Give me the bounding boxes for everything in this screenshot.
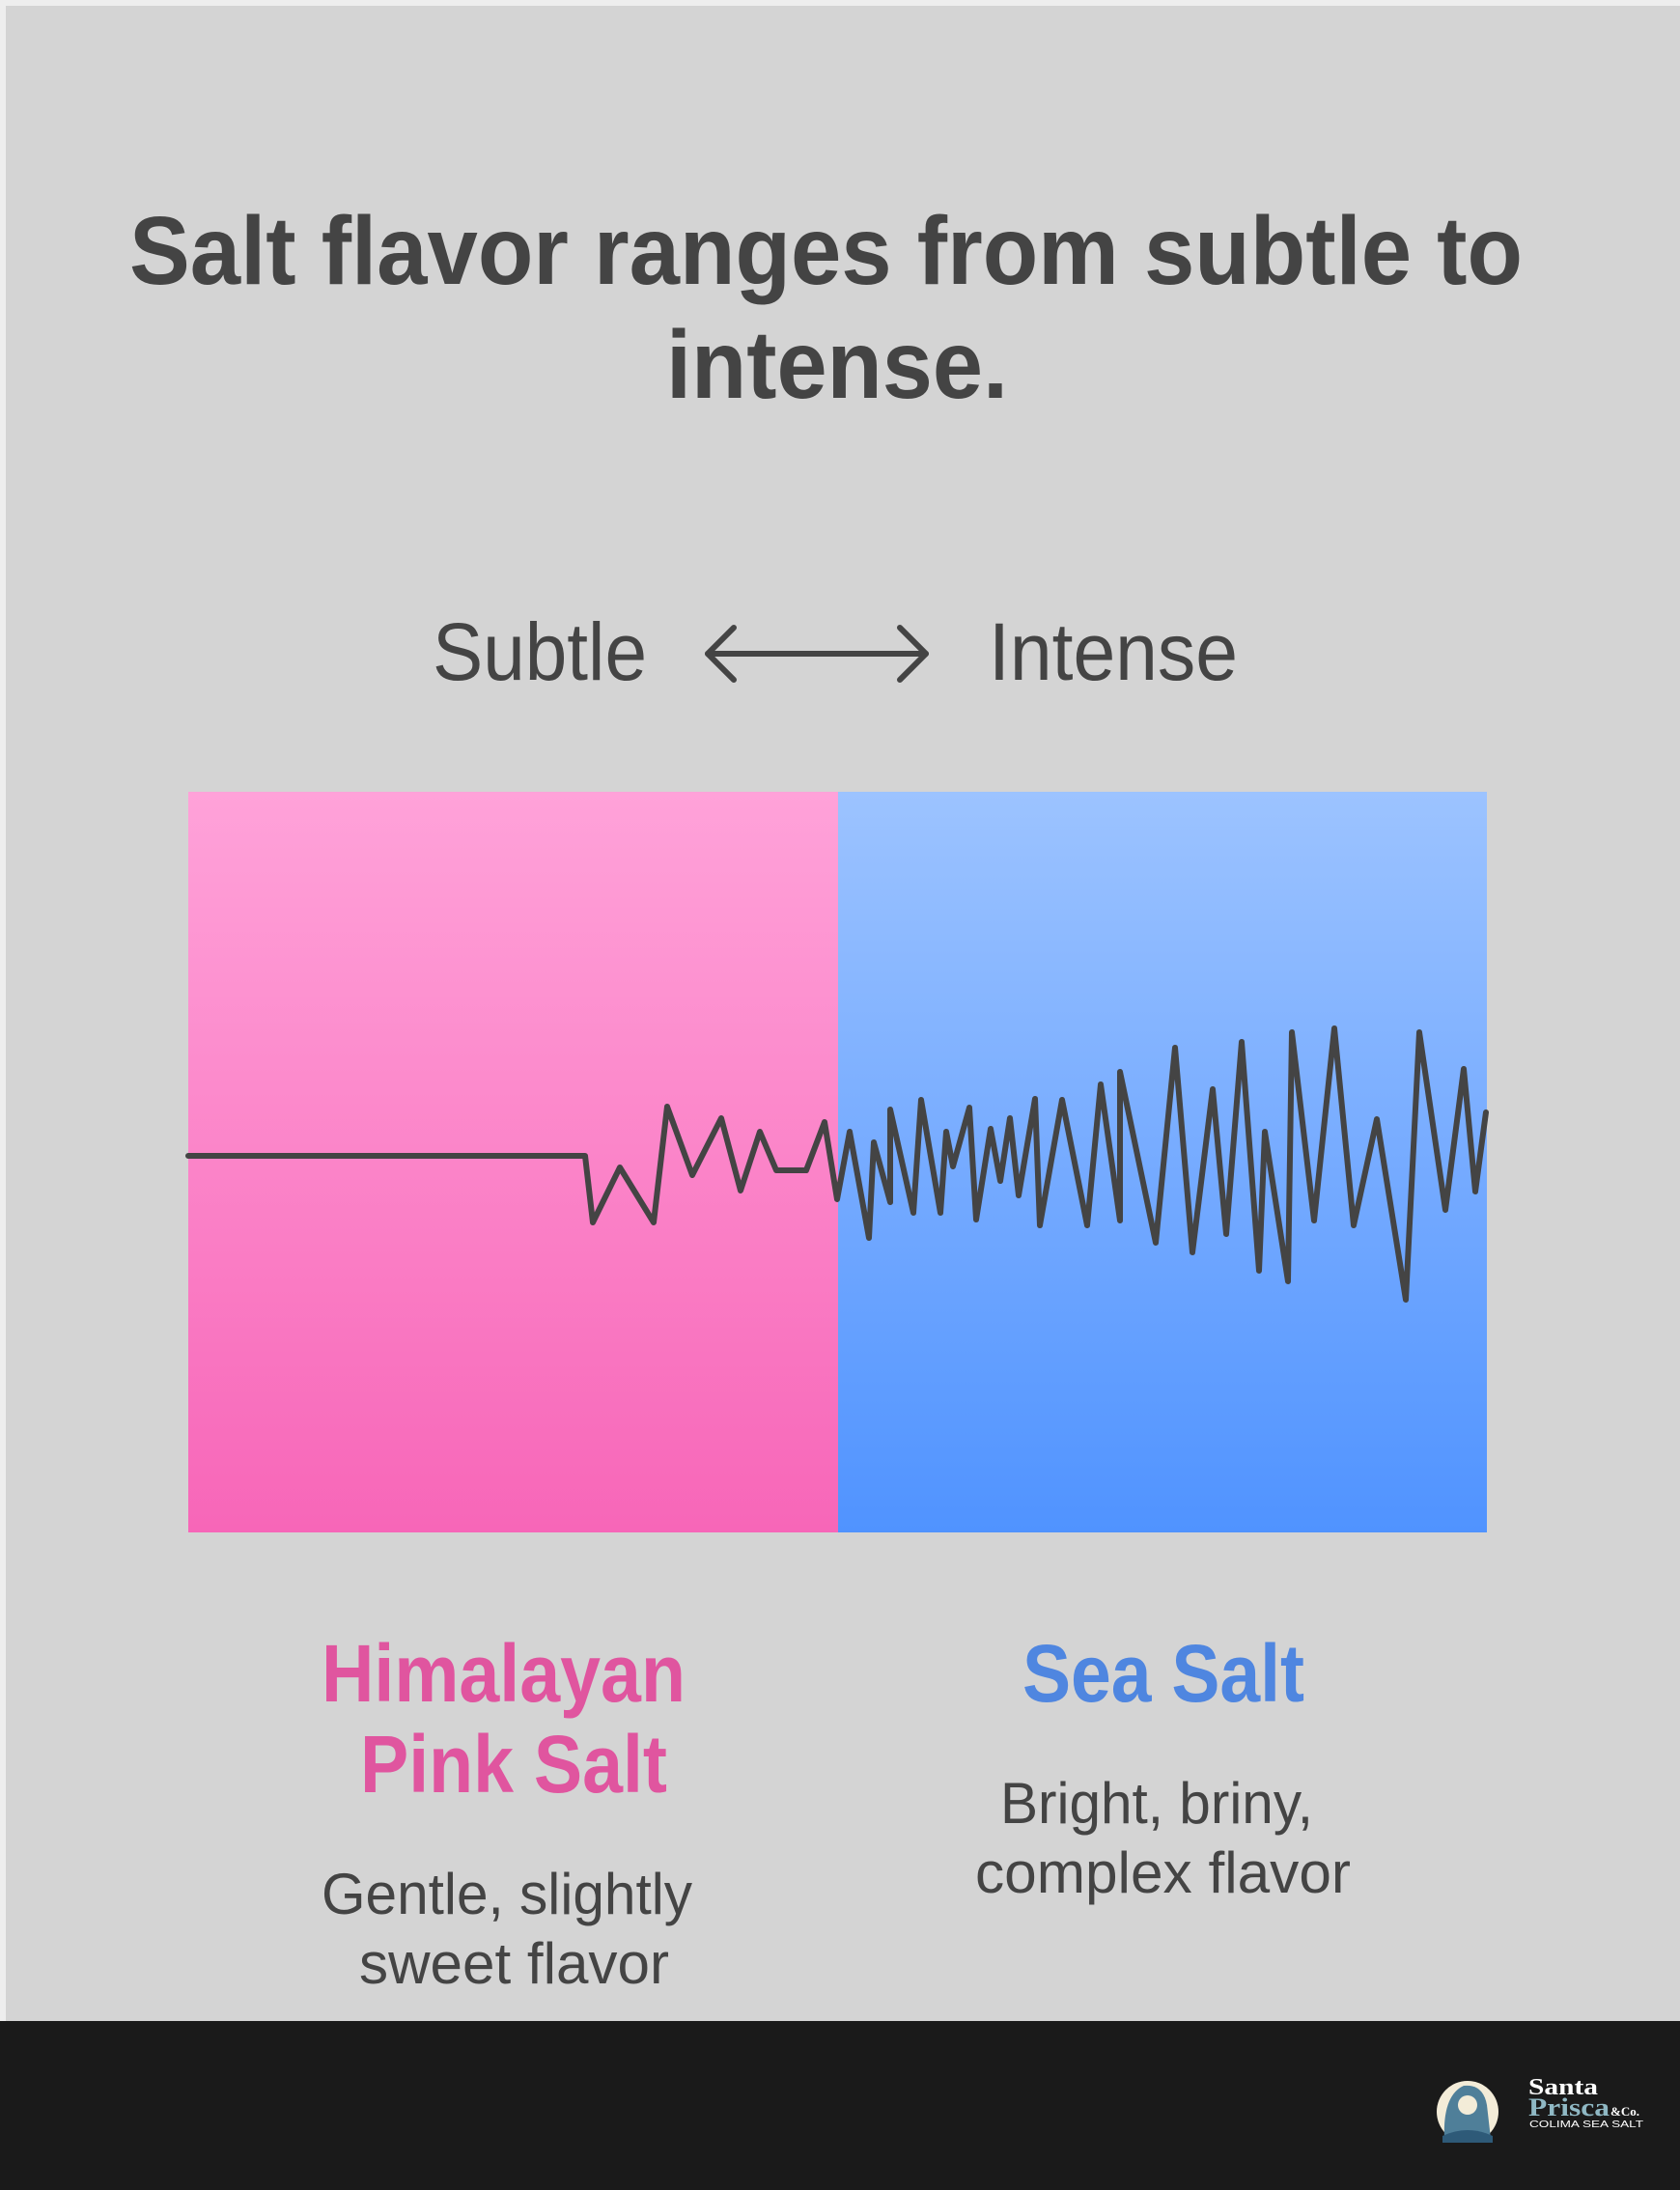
label: himalayan pink salt: Himalayan xyxy=(322,1628,686,1719)
panel: sea salt blue xyxy=(838,792,1487,1532)
panel: himalayan pink xyxy=(188,792,838,1532)
logo: Santa xyxy=(1528,2075,1598,2100)
label: sea salt xyxy=(975,1628,1351,1905)
label: himalayan pink salt xyxy=(322,1628,692,1996)
scale label: subtle to intense: Intense xyxy=(989,606,1238,697)
title: intense. xyxy=(666,311,1008,419)
title: Salt flavor ranges from subtle to xyxy=(129,197,1523,305)
arrow: double-headed xyxy=(708,628,926,680)
logo: &Co. xyxy=(1610,2104,1639,2119)
waveform xyxy=(188,1028,1486,1300)
scale label: subtle to intense xyxy=(433,606,1238,697)
scale label: subtle to intense: Subtle xyxy=(433,606,647,697)
footer xyxy=(0,2021,1680,2190)
label: himalayan pink salt: Pink Salt xyxy=(360,1719,667,1810)
label: sea salt: complex flavor xyxy=(975,1840,1351,1905)
label: himalayan pink salt: sweet flavor xyxy=(359,1931,669,1996)
label: himalayan pink salt: Gentle, slightly xyxy=(322,1862,692,1926)
label: sea salt: Sea Salt xyxy=(1022,1628,1304,1719)
logo: COLIMA SEA SALT xyxy=(1529,2120,1643,2130)
title xyxy=(129,197,1523,419)
label: sea salt: Bright, briny, xyxy=(1000,1771,1313,1836)
logo: Prisca xyxy=(1528,2093,1610,2121)
logo xyxy=(1437,2075,1643,2143)
